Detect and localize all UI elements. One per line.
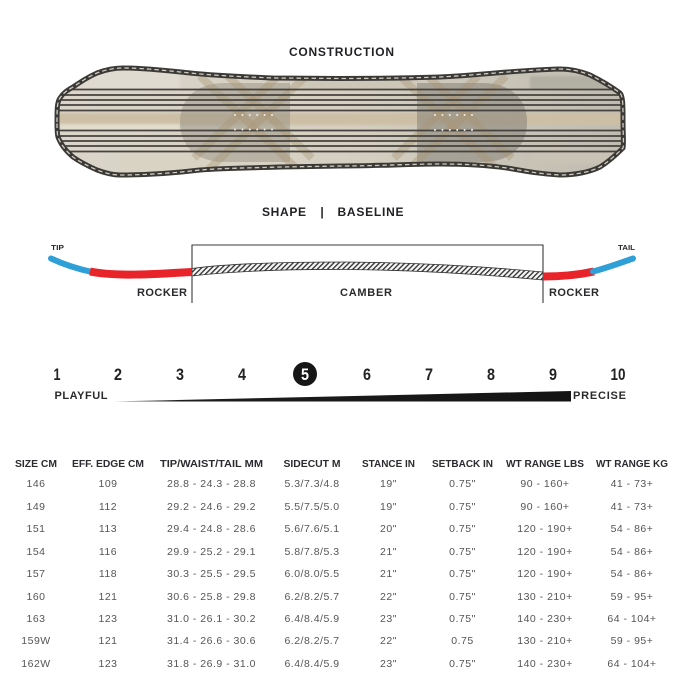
row 163: 123 bbox=[98, 613, 118, 625]
row 151 bbox=[26, 523, 653, 535]
camber section bbox=[192, 262, 543, 280]
row 146: 109 bbox=[98, 478, 118, 490]
row 162W: 0.75" bbox=[449, 658, 476, 670]
label: rocker right: ROCKER bbox=[549, 287, 599, 299]
row 159W: 22" bbox=[380, 635, 397, 647]
row 151: 20" bbox=[380, 523, 397, 535]
row 146: 41 - 73+ bbox=[611, 478, 653, 490]
row 154: 116 bbox=[99, 546, 117, 558]
scale numbers: 1 bbox=[54, 365, 60, 384]
heading: shape and baseline bbox=[262, 205, 404, 219]
row 162W: 6.4/8.4/5.9 bbox=[284, 658, 340, 670]
row 157 bbox=[26, 568, 653, 580]
row 154: 5.8/7.8/5.3 bbox=[284, 546, 340, 558]
row 160: 0.75" bbox=[449, 591, 476, 603]
tip rocker: blue bbox=[51, 258, 92, 272]
table header: SIZE CM bbox=[15, 459, 57, 470]
inserts: left bbox=[234, 114, 273, 130]
selected rating: 5 bbox=[293, 362, 317, 386]
row 157: 0.75" bbox=[449, 568, 476, 580]
row 151: 120 - 190+ bbox=[517, 523, 573, 535]
row 160: 30.6 - 25.8 - 29.8 bbox=[167, 591, 256, 603]
scale numbers: 10 bbox=[610, 365, 626, 384]
row 159W: 121 bbox=[98, 635, 118, 647]
row 163: 6.4/8.4/5.9 bbox=[284, 613, 340, 625]
row 157: 54 - 86+ bbox=[611, 568, 653, 580]
specification table bbox=[15, 459, 668, 670]
row 162W: 64 - 104+ bbox=[607, 658, 657, 670]
scale numbers: 6 bbox=[363, 365, 371, 384]
sidewall pattern bbox=[57, 68, 623, 175]
row 146: 28.8 - 24.3 - 28.8 bbox=[167, 478, 256, 490]
row 159W bbox=[21, 635, 653, 647]
table header: WT RANGE LBS bbox=[506, 459, 584, 470]
row 159W: 6.2/8.2/5.7 bbox=[284, 635, 340, 647]
row 162W: 31.8 - 26.9 - 31.0 bbox=[167, 658, 256, 670]
scale numbers: 8 bbox=[487, 365, 495, 384]
table header: SIDECUT M bbox=[284, 459, 340, 470]
row 163: 0.75" bbox=[449, 613, 476, 625]
row 160: 59 - 95+ bbox=[611, 591, 653, 603]
row 154: 154 bbox=[26, 546, 46, 558]
tail rocker: red bbox=[543, 272, 594, 276]
scale wedge bbox=[113, 391, 571, 402]
row 160: 160 bbox=[26, 591, 46, 603]
scale numbers: 9 bbox=[549, 365, 557, 384]
tail rocker: blue bbox=[593, 258, 633, 272]
row 149: 19" bbox=[380, 501, 397, 513]
row 146: 146 bbox=[26, 478, 46, 490]
row 149 bbox=[26, 501, 653, 513]
row 162W: 23" bbox=[380, 658, 397, 670]
label: tail: TAIL bbox=[618, 243, 635, 252]
row 151: 113 bbox=[99, 523, 117, 535]
row 157: 6.0/8.0/5.5 bbox=[284, 568, 340, 580]
row 151: 5.6/7.6/5.1 bbox=[284, 523, 340, 535]
inserts: right bbox=[434, 114, 473, 131]
scale numbers: 7 bbox=[425, 365, 433, 384]
row 149: 29.2 - 24.6 - 29.2 bbox=[167, 501, 256, 513]
table header: TIP/WAIST/TAIL MM bbox=[160, 459, 263, 470]
row 159W: 159W bbox=[21, 635, 51, 647]
row 154: 21" bbox=[380, 546, 397, 558]
scale numbers: 2 bbox=[114, 365, 122, 384]
row 149: 0.75" bbox=[449, 501, 476, 513]
row 149: 112 bbox=[99, 501, 117, 513]
row 159W: 0.75 bbox=[451, 635, 474, 647]
playful to precise scale bbox=[54, 362, 626, 402]
heading: shape and baseline: | bbox=[320, 205, 324, 219]
row 154: 29.9 - 25.2 - 29.1 bbox=[167, 546, 256, 558]
row 151: 29.4 - 24.8 - 28.6 bbox=[167, 523, 256, 535]
row 162W: 140 - 230+ bbox=[517, 658, 573, 670]
row 163: 31.0 - 26.1 - 30.2 bbox=[167, 613, 256, 625]
heading: shape and baseline: SHAPE bbox=[262, 205, 306, 219]
scale numbers: 4 bbox=[238, 365, 246, 384]
snowboard construction diagram bbox=[50, 60, 630, 180]
row 162W: 123 bbox=[98, 658, 118, 670]
carbon X: right bbox=[394, 76, 512, 170]
row 159W: 31.4 - 26.6 - 30.6 bbox=[167, 635, 256, 647]
row 154: 54 - 86+ bbox=[611, 546, 653, 558]
row 151: 151 bbox=[26, 523, 46, 535]
binding zone: left bbox=[180, 83, 290, 162]
row 146: 5.3/7.3/4.8 bbox=[284, 478, 340, 490]
label: tip: TIP bbox=[51, 243, 64, 252]
row 149: 5.5/7.5/5.0 bbox=[284, 501, 340, 513]
row 149: 90 - 160+ bbox=[520, 501, 570, 513]
row 163: 163 bbox=[26, 613, 46, 625]
table header: SETBACK IN bbox=[432, 459, 493, 470]
row 160: 22" bbox=[380, 591, 397, 603]
row 160 bbox=[26, 591, 653, 603]
row 162W bbox=[21, 658, 657, 670]
selected rating: 5: 5 bbox=[301, 365, 309, 384]
table header: EFF. EDGE CM bbox=[72, 459, 144, 470]
label: playful: PLAYFUL bbox=[54, 390, 108, 402]
scale numbers: 3 bbox=[176, 365, 184, 384]
row 146: 0.75" bbox=[449, 478, 476, 490]
row 163: 64 - 104+ bbox=[607, 613, 657, 625]
row 160: 130 - 210+ bbox=[517, 591, 573, 603]
binding zone: right bbox=[417, 83, 527, 162]
row 157: 118 bbox=[99, 568, 117, 580]
table header bbox=[15, 459, 668, 470]
row 157: 120 - 190+ bbox=[517, 568, 573, 580]
baseline profile diagram bbox=[51, 243, 635, 303]
camber bracket bbox=[192, 245, 543, 303]
label: camber: CAMBER bbox=[340, 287, 392, 299]
stringer lines bbox=[50, 90, 630, 152]
heading: shape and baseline: BASELINE bbox=[338, 205, 404, 219]
row 146: 90 - 160+ bbox=[520, 478, 570, 490]
row 159W: 130 - 210+ bbox=[517, 635, 573, 647]
row 157: 30.3 - 25.5 - 29.5 bbox=[167, 568, 256, 580]
row 163: 140 - 230+ bbox=[517, 613, 573, 625]
row 159W: 59 - 95+ bbox=[611, 635, 653, 647]
row 151: 0.75" bbox=[449, 523, 476, 535]
sidewall outline bbox=[57, 68, 623, 175]
row 163 bbox=[26, 613, 657, 625]
label: precise: PRECISE bbox=[573, 390, 626, 402]
heading: construction: CONSTRUCTION bbox=[289, 45, 394, 59]
row 154: 0.75" bbox=[449, 546, 476, 558]
row 151: 54 - 86+ bbox=[611, 523, 653, 535]
row 149: 41 - 73+ bbox=[611, 501, 653, 513]
row 162W: 162W bbox=[21, 658, 51, 670]
scale numbers bbox=[54, 365, 626, 384]
row 146 bbox=[26, 478, 653, 490]
row 154: 120 - 190+ bbox=[517, 546, 573, 558]
row 149: 149 bbox=[26, 501, 46, 513]
table header: WT RANGE KG bbox=[596, 459, 668, 470]
tip rocker: red bbox=[90, 272, 192, 275]
row 157: 157 bbox=[26, 568, 46, 580]
table header: STANCE IN bbox=[362, 459, 415, 470]
row 163: 23" bbox=[380, 613, 397, 625]
label: rocker left: ROCKER bbox=[137, 287, 187, 299]
row 154 bbox=[26, 546, 653, 558]
board core wood bbox=[60, 70, 621, 172]
carbon X: left bbox=[194, 76, 312, 170]
row 160: 6.2/8.2/5.7 bbox=[284, 591, 340, 603]
row 146: 19" bbox=[380, 478, 397, 490]
row 157: 21" bbox=[380, 568, 397, 580]
row 160: 121 bbox=[98, 591, 118, 603]
